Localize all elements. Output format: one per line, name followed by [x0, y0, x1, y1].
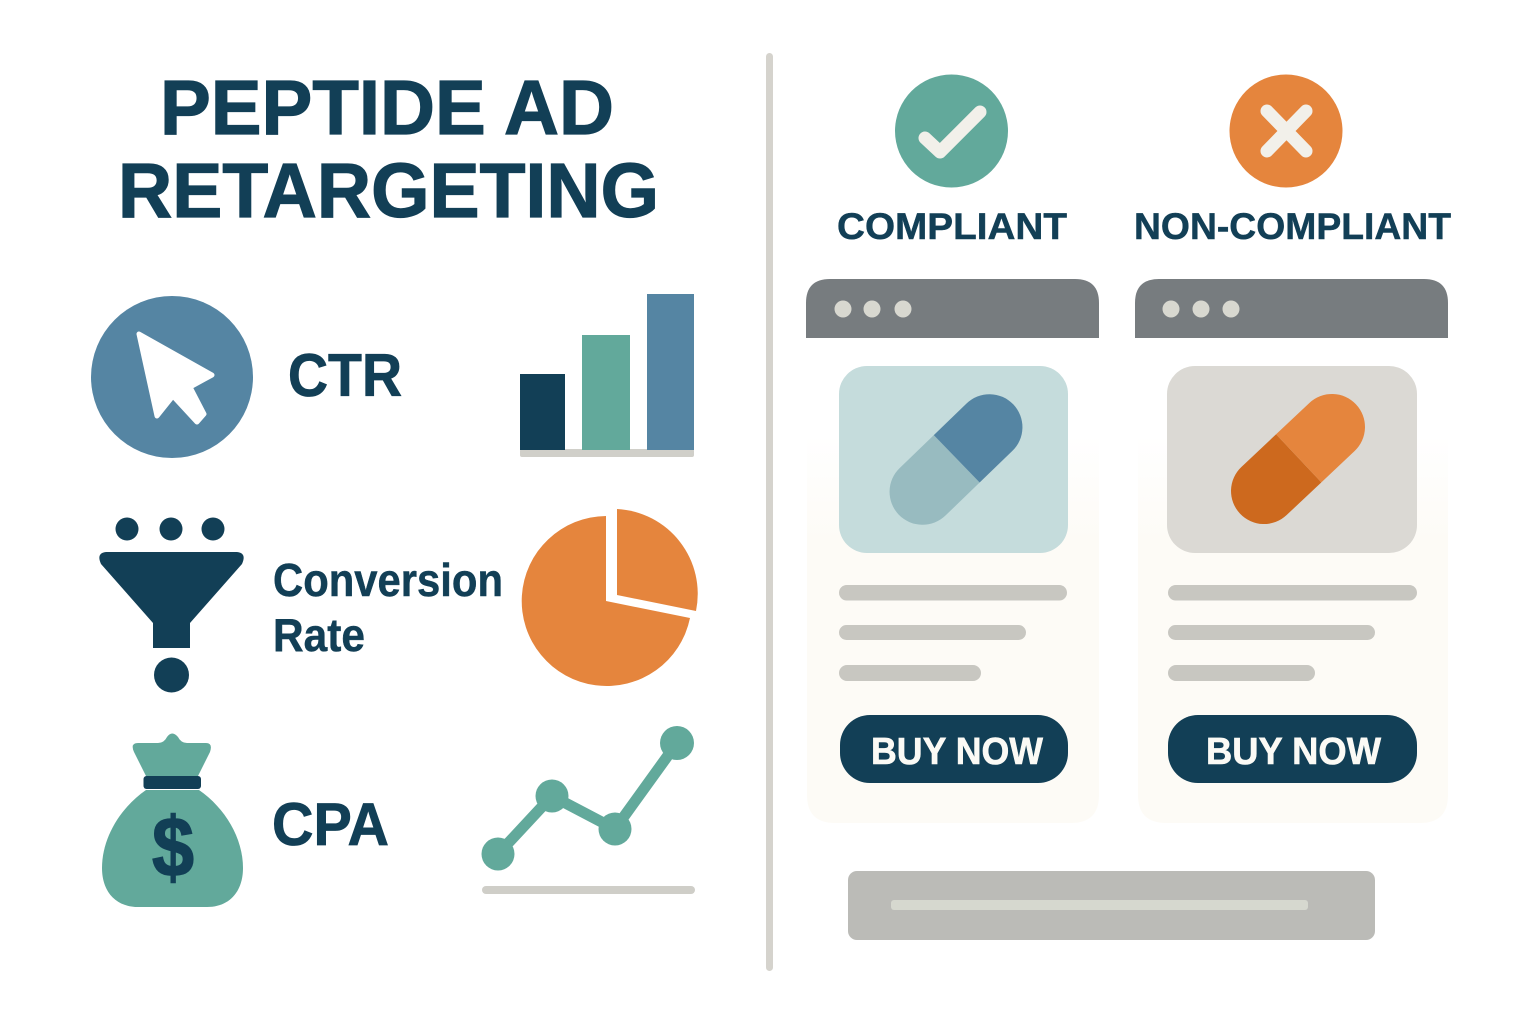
heading: non-compliant: NON-COMPLIANT — [1134, 206, 1451, 247]
button: buy now: BUY NOW — [871, 731, 1043, 773]
label: conversion rate: Rate — [273, 609, 365, 661]
button: buy now — [1168, 715, 1417, 783]
line chart — [482, 726, 695, 894]
label: conversion rate — [273, 554, 503, 661]
button: buy now — [840, 715, 1068, 783]
product image tile — [1167, 366, 1417, 553]
bar chart — [520, 294, 694, 457]
text placeholder lines — [1168, 585, 1417, 681]
title: RETARGETING — [118, 148, 659, 234]
label: CTR: CTR — [288, 342, 402, 409]
divider — [766, 53, 773, 971]
icon: orange pill — [1217, 380, 1379, 538]
page body — [807, 338, 1099, 823]
icon: non-compliant cross — [1230, 74, 1342, 188]
title — [118, 65, 659, 234]
icon: CTR cursor — [91, 296, 253, 458]
browser header — [1135, 279, 1448, 338]
product image tile — [839, 366, 1068, 553]
icon: money bag: $ — [152, 800, 194, 894]
footer placeholder bar — [848, 871, 1375, 940]
heading: compliant: COMPLIANT — [837, 206, 1067, 247]
title: PEPTIDE AD — [160, 65, 614, 151]
icon: money bag — [102, 734, 243, 907]
panel: non-compliant ad mockup — [1135, 279, 1448, 823]
icon: blue pill — [876, 381, 1036, 538]
button: buy now: BUY NOW — [1206, 731, 1381, 773]
panel: compliant ad mockup — [806, 279, 1099, 823]
label: CPA: CPA — [272, 791, 389, 858]
pie chart — [522, 509, 698, 686]
text placeholder lines — [839, 585, 1067, 681]
icon: compliant check — [895, 74, 1008, 188]
page body — [1138, 338, 1448, 823]
icon: conversion funnel — [99, 518, 244, 692]
label: conversion rate: Conversion — [273, 554, 503, 606]
browser header — [806, 279, 1099, 338]
